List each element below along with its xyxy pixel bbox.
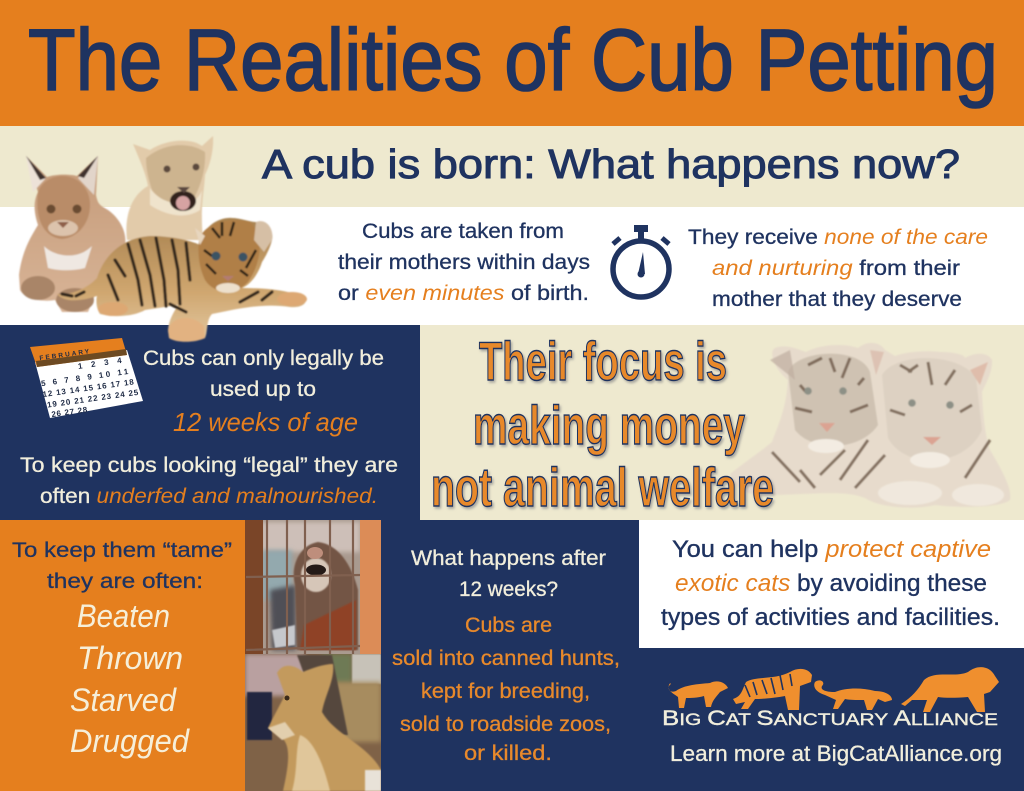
- text: outcomes: sold to roadside zoos,: [400, 713, 611, 736]
- text: taken from mothers: [338, 220, 590, 305]
- text: focus is making money: making money: [473, 394, 745, 456]
- text: call to action: [661, 536, 1000, 631]
- panel: logo: [639, 648, 1024, 791]
- panel: legal age: [0, 325, 420, 520]
- lion cub: [126, 136, 213, 240]
- text: tame intro: [12, 539, 232, 593]
- panel: cub is born band: [0, 126, 1024, 325]
- text: focus is making money: Their focus is: [479, 330, 727, 392]
- text: taken from mothers: their mothers within days: [338, 251, 590, 274]
- text: legal age: often underfed and malnourished.: [40, 485, 378, 508]
- icon: calendar: [30, 338, 143, 420]
- list: abuses: Drugged: [70, 723, 190, 759]
- text: what happens: What happens after: [411, 547, 606, 570]
- panel: focus on money background: [420, 325, 1024, 520]
- text: outcomes: sold into canned hunts,: [392, 647, 620, 670]
- text: tame intro: To keep them “tame”: [12, 539, 232, 562]
- text: taken from mothers: Cubs are taken from: [362, 220, 564, 243]
- list: abuses: Beaten: [77, 598, 170, 634]
- list: abuses: Thrown: [77, 640, 183, 676]
- icon: calendar: 5 6 7 8 9 10 11: [40, 367, 129, 388]
- text: outcomes: [392, 614, 620, 765]
- icon: stopwatch: [613, 225, 669, 297]
- text: legal age: 12 weeks of age: [173, 407, 358, 437]
- text: tame intro: they are often:: [47, 570, 203, 593]
- text: legal age: To keep cubs looking “legal” they are: [20, 454, 398, 477]
- logo wordmark: BIG CAT SANCTUARY ALLIANCE: [662, 707, 998, 730]
- text: call to action: types of activities and facilities.: [661, 604, 1000, 631]
- image: three cubs: [19, 136, 307, 342]
- text: outcomes: Cubs are: [465, 614, 552, 637]
- text: focus is making money: [431, 330, 774, 518]
- icon: calendar: FEBRUARY: [39, 348, 90, 362]
- heading: a cub is born: A cub is born: What happens now?: [262, 141, 960, 187]
- image: white tiger cubs: [730, 343, 1010, 508]
- text: no care: mother that they deserve: [712, 288, 962, 311]
- icon: cat silhouettes: [669, 667, 999, 712]
- lynx: [19, 156, 125, 312]
- text: legal age: used up to: [210, 378, 316, 401]
- text: what happens: [411, 547, 606, 601]
- image: lion cub with visitor: [245, 654, 381, 791]
- text: website: Learn more at BigCatAlliance.org: [670, 741, 1002, 766]
- text: outcomes: kept for breeding,: [421, 680, 590, 703]
- text: no care: They receive none of the care: [688, 226, 988, 249]
- text: legal age: [20, 347, 398, 508]
- panel: title band: [0, 0, 1024, 126]
- text: call to action: exotic cats by avoiding these: [675, 570, 987, 597]
- text: taken from mothers: or even minutes of birth.: [338, 282, 589, 305]
- icon: calendar: 19 20 21 22 23 24 25: [46, 388, 139, 410]
- panel: you can help: [639, 520, 1024, 648]
- text: call to action: You can help protect captive: [672, 536, 991, 563]
- text: legal age: Cubs can only legally be: [143, 347, 384, 370]
- icon: calendar: 12 13 14 15 16 17 18: [42, 377, 135, 399]
- image: caged cub: [245, 520, 381, 655]
- icon: calendar: 1 2 3 4: [77, 356, 123, 371]
- panel: keep them tame: [0, 520, 245, 791]
- tiger cub: [57, 218, 307, 342]
- text: focus is making money: not animal welfare: [431, 456, 774, 518]
- icon: calendar: 26 27 28: [51, 405, 88, 419]
- text: what happens: 12 weeks?: [459, 578, 558, 601]
- text: outcomes: or killed.: [464, 742, 552, 765]
- list: abuses: Starved: [70, 682, 177, 718]
- text: no care: and nurturing from their: [712, 257, 960, 280]
- list: abuses: [70, 598, 190, 759]
- text: no care: [688, 226, 988, 311]
- panel: after 12 weeks: [381, 520, 639, 791]
